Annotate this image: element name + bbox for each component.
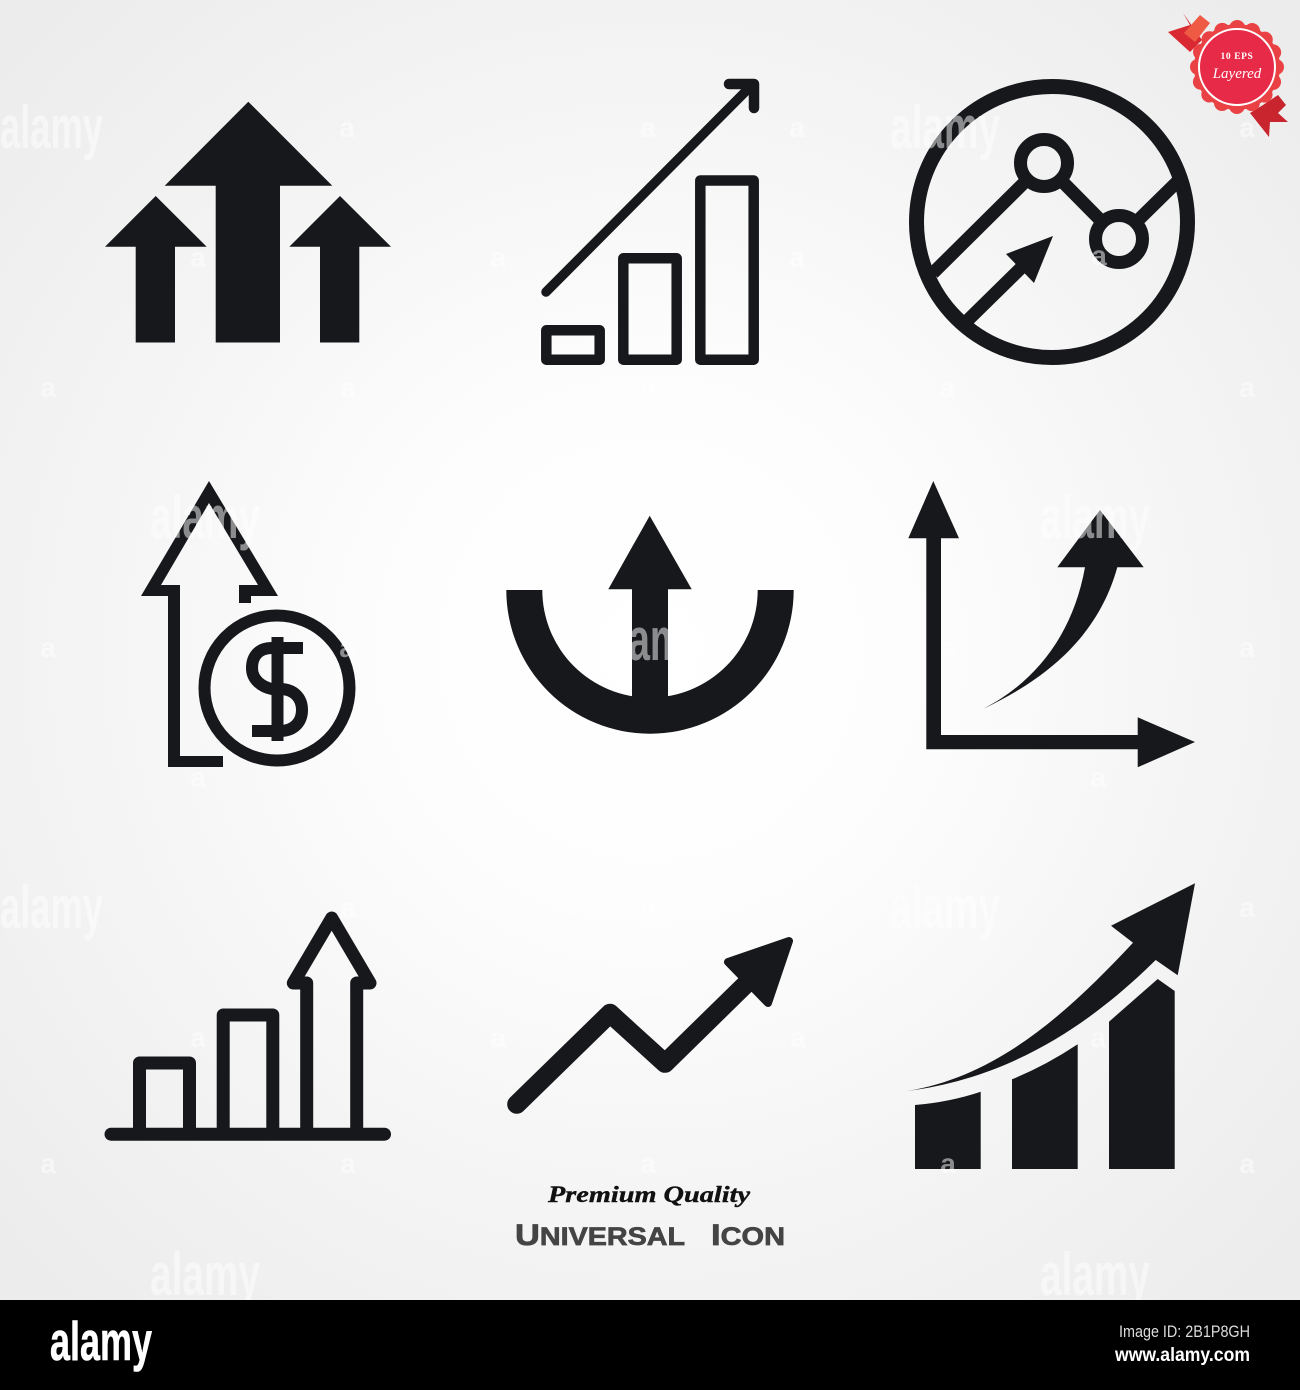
icon: circle with line chart and arrow — [916, 86, 1188, 358]
watermarks: alamy — [890, 94, 1000, 161]
watermarks: a — [339, 632, 355, 663]
heading: universal icon — [515, 1219, 785, 1252]
watermarks: a — [789, 762, 805, 793]
watermarks: a — [939, 372, 955, 403]
watermarks: alamy — [150, 484, 260, 551]
watermarks: a — [1090, 1022, 1106, 1053]
watermarks: a — [40, 1148, 56, 1179]
watermarks: alamy — [0, 94, 103, 161]
icon: arrow rising from semicircle bowl — [506, 516, 794, 734]
watermarks: a — [789, 242, 805, 273]
watermarks: a — [40, 372, 56, 403]
watermarks: a — [1239, 632, 1255, 663]
icon: three up arrows — [105, 102, 391, 342]
icon: outlined bars with up arrow — [111, 918, 384, 1134]
badge: 10 EPS layered seal — [1168, 13, 1288, 137]
watermarks: a — [340, 1148, 356, 1179]
watermarks: a — [190, 242, 206, 273]
heading: universal icon: UNIVERSAL — [515, 1219, 685, 1252]
watermarks: a — [490, 242, 506, 273]
watermarks: a — [339, 112, 355, 143]
watermarks: a — [490, 1022, 506, 1053]
watermarks: a — [640, 372, 656, 403]
watermarks: alamy — [150, 1241, 260, 1308]
badge: 10 EPS layered seal: 10 EPS — [1221, 52, 1253, 62]
watermarks: a — [340, 372, 356, 403]
watermarks: a — [1239, 892, 1255, 923]
watermarks: a — [190, 1022, 206, 1053]
watermarks: alamy — [890, 874, 1000, 941]
icon: up arrow with dollar coin — [141, 481, 350, 767]
watermarks: a — [789, 112, 805, 143]
footer bar — [0, 1300, 1300, 1390]
watermarks: a — [941, 632, 957, 663]
watermarks: a — [1239, 1148, 1255, 1179]
badge: 10 EPS layered seal: Layered — [1212, 66, 1262, 82]
watermarks: a — [490, 762, 506, 793]
heading: universal icon: ICON — [711, 1219, 785, 1252]
watermarks: a — [1090, 762, 1106, 793]
watermarks: a — [790, 1022, 806, 1053]
watermarks: a — [640, 1148, 656, 1179]
watermarks: a — [1239, 112, 1255, 143]
watermarks: alamy — [1040, 484, 1150, 551]
footer bar: Image ID: 2B1P8GH — [1119, 1322, 1250, 1341]
watermarks: a — [190, 762, 206, 793]
watermarks: a — [640, 112, 656, 143]
watermarks: alamy — [596, 606, 706, 673]
icon: axes with growth curve arrow — [908, 481, 1195, 767]
watermarks: a — [940, 1148, 956, 1179]
watermarks: a — [1239, 372, 1255, 403]
tagline: premium quality: Premium Quality — [547, 1182, 751, 1207]
icon: solid bars with swoosh arrow — [907, 883, 1195, 1169]
icon: zigzag rising arrow — [517, 941, 789, 1104]
footer bar: alamy — [50, 1310, 152, 1372]
watermarks: alamy — [1040, 1241, 1150, 1308]
footer bar: www.alamy.com — [1114, 1345, 1250, 1366]
watermarks: alamy — [0, 874, 103, 941]
watermarks: a — [40, 632, 56, 663]
watermarks: a — [340, 892, 356, 923]
watermarks: a — [1091, 240, 1107, 271]
watermarks: a — [640, 892, 656, 923]
icon: outlined bars with rising arrow — [546, 84, 754, 360]
